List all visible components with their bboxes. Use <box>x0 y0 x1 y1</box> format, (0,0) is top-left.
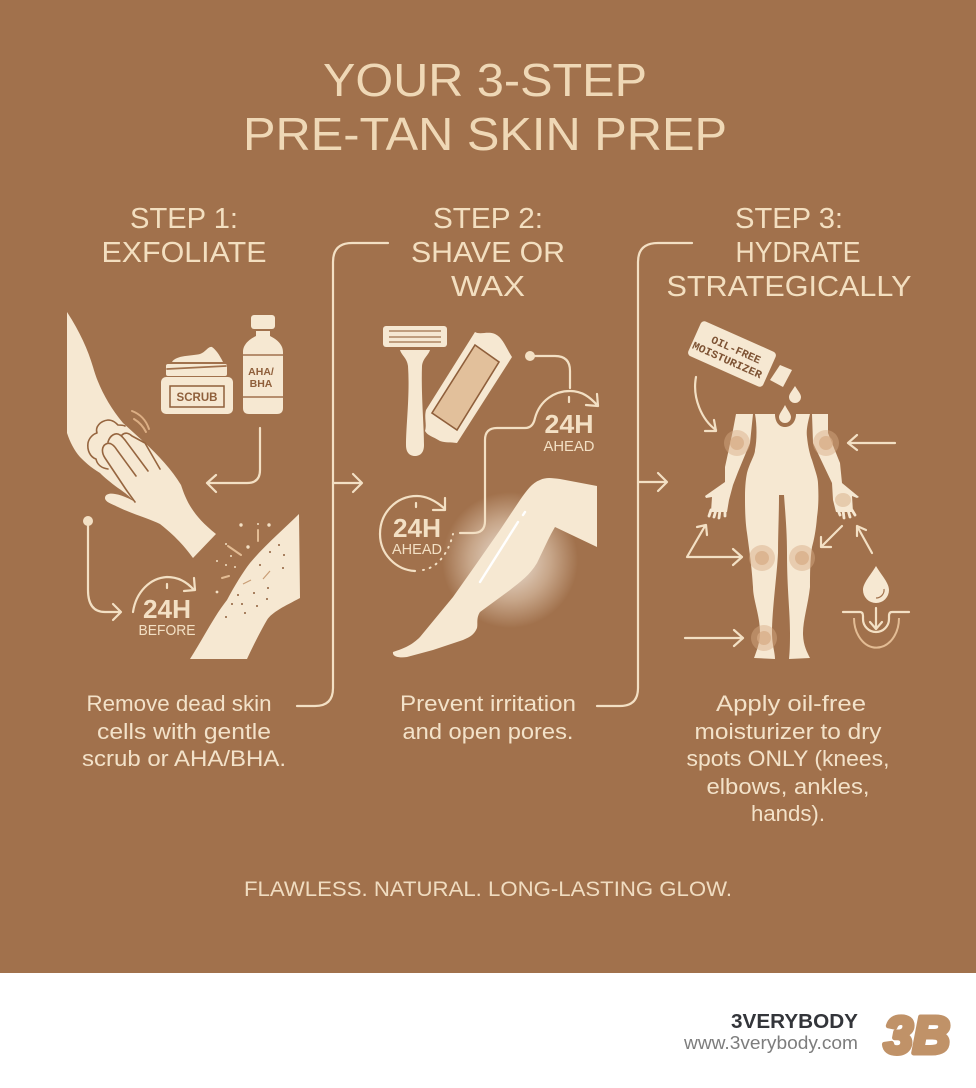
footer band <box>0 973 976 1088</box>
heading: step 1: EXFOLIATE <box>102 237 266 269</box>
heading: step 2: WAX <box>451 271 525 303</box>
illustration: shaved leg <box>393 478 597 657</box>
motion waves <box>132 411 149 432</box>
step 3 description <box>686 691 890 826</box>
step 2 description <box>400 691 576 744</box>
step 2 description: and open pores. <box>402 719 574 744</box>
step 3 description: spots ONLY (knees, <box>686 746 890 771</box>
timer: 24H ahead upper: AHEAD <box>544 438 595 455</box>
icon: AHA/BHA bottle: BHA <box>250 378 273 390</box>
right arm and hand <box>812 414 859 512</box>
icon: AHA/BHA bottle <box>243 315 283 414</box>
icon: absorbing drop <box>843 566 909 648</box>
arrow: products to hand <box>207 428 260 492</box>
timer: 24H before: BEFORE <box>138 622 196 639</box>
brand name: 3VERYBODY <box>731 1011 859 1033</box>
icon: wax strip <box>425 332 512 443</box>
dry spot highlights <box>724 430 839 651</box>
illustration: arm and hand with scrub <box>67 312 216 558</box>
glow behind leg <box>442 492 578 628</box>
title: PRE-TAN SKIN PREP <box>243 108 727 160</box>
icon: moisturizer bottle: MOISTURIZER <box>690 341 764 382</box>
step 3 description: elbows, ankles, <box>706 774 870 799</box>
step 3 description: hands). <box>751 801 825 826</box>
icon: AHA/BHA bottle: AHA/ <box>248 366 274 378</box>
timer: 24H ahead lower: AHEAD <box>392 541 442 558</box>
illustration: exfoliated skin patch <box>190 514 300 659</box>
icon: scrub jar: SCRUB <box>177 392 217 404</box>
tagline: FLAWLESS. NATURAL. LONG-LASTING GLOW. <box>244 878 732 901</box>
icon: falling drop <box>789 386 801 403</box>
step 1 description <box>82 691 286 771</box>
timer: 24H ahead lower <box>380 496 453 571</box>
finger lines <box>102 443 136 502</box>
step 3 description: Apply oil-free <box>716 691 866 716</box>
timer: 24H before: 24H <box>143 594 191 624</box>
title: YOUR 3-STEP <box>323 54 647 106</box>
icon: scrub jar <box>161 347 233 414</box>
connector: step 2 to step 3 <box>597 243 692 706</box>
drop into neck <box>779 405 791 423</box>
heading: step 3: STRATEGICALLY <box>666 271 912 303</box>
connector: timers and dot <box>460 351 598 533</box>
icon: moisturizer bottle: OIL-FREE <box>709 335 762 368</box>
timer: 24H before <box>133 577 196 639</box>
arrow: dot to 24H before <box>83 516 121 620</box>
left arm and hand <box>705 414 753 512</box>
heading: step 2 <box>411 203 565 303</box>
exfoliated particles <box>216 523 271 593</box>
timer: 24H ahead upper <box>544 409 595 455</box>
title <box>243 54 727 160</box>
heading: step 3: STEP 3: <box>735 203 843 235</box>
heading: step 2: STEP 2: <box>433 203 543 235</box>
heading: step 1: STEP 1: <box>130 203 238 235</box>
website: www.3verybody.com <box>683 1033 858 1053</box>
timer: 24H ahead lower: 24H <box>393 513 441 543</box>
heading: step 2: SHAVE OR <box>411 237 565 269</box>
step 1 description: cells with gentle <box>97 719 271 744</box>
heading: step 3 <box>666 203 912 303</box>
heading: step 3: HYDRATE <box>736 237 860 269</box>
arrows pointing to dry spots <box>685 377 895 646</box>
timer: 24H ahead upper: 24H <box>544 409 594 439</box>
icon: moisturizer bottle <box>687 320 792 388</box>
step 1 description: scrub or AHA/BHA. <box>82 746 286 771</box>
scrub foam outline <box>88 420 125 469</box>
heading: step 1 <box>102 203 266 269</box>
logo: 3B <box>884 1007 950 1065</box>
illustration: body figure <box>705 414 859 659</box>
icon: razor <box>383 326 447 456</box>
connector: step 1 to step 2 <box>297 243 388 706</box>
step 3 description: moisturizer to dry <box>694 719 882 744</box>
step 1 description: Remove dead skin <box>86 691 272 716</box>
step 2 description: Prevent irritation <box>400 691 576 716</box>
